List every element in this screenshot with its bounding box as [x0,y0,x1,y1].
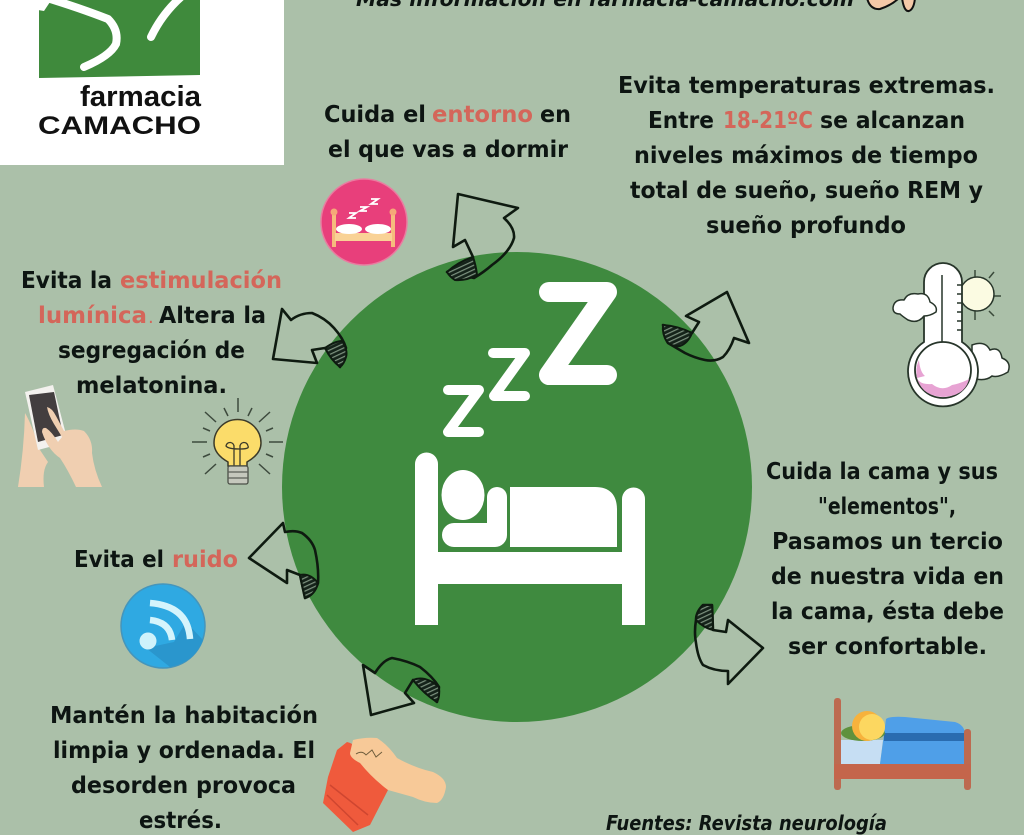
text: temperaturas: 18-21ºC [723,106,813,134]
pillow [841,725,885,741]
bed [415,453,645,625]
logo text: farmacia [80,81,202,113]
tube line and ticks [942,275,962,342]
arrow: to entorno [447,194,518,280]
blanket [880,717,965,764]
text: cama [766,457,1004,660]
arrow: to estimulación [273,309,346,367]
logo mark [38,0,200,78]
text: temperaturas: sueño profundo [706,211,906,239]
text: temperaturas: Evita temperaturas extremas. [618,71,995,99]
phone [25,385,68,450]
text: temperaturas: Entre [648,106,714,134]
big Z [549,292,607,375]
cloud left [893,294,936,321]
icon: hand holding phone [18,385,102,487]
icon: pink bed circle [321,179,407,265]
icon: person in bed [834,698,971,790]
text: estimulación lumínica: segregación de [58,336,245,364]
hand [350,738,446,803]
arrow: to ruido [249,523,318,598]
text: cama: Cuida la cama y sus [766,457,998,485]
arrow: to habitación [363,658,439,715]
arrow: to cama [695,605,763,684]
sheet [841,740,883,764]
arrow: to temperaturas [663,292,749,361]
text: ruido: Evita el [74,545,164,573]
icon: thermometer with sun and clouds [893,263,1009,406]
bed frame [834,698,841,790]
text: entorno: entorno [432,100,533,128]
text: habitación [50,701,318,834]
icon: light bulb [192,398,283,484]
head [442,470,484,520]
icon: pointing hand [867,0,915,11]
text: entorno: el que vas a dormir [328,135,568,163]
text: habitación: Mantén la habitación [50,701,318,729]
text: habitación: desorden provoca [71,771,296,799]
sun [960,270,1001,320]
screen [29,392,63,442]
text: estimulación lumínica: Altera la [159,301,266,329]
icon: hand holding red towel [323,738,446,832]
text: estimulación lumínica: Evita la [21,266,112,294]
text: habitación: limpia y ordenada. El [53,736,315,764]
text: ruido: ruido [172,545,238,573]
text: entorno: Cuida el [324,100,426,128]
text: estimulación lumínica: lumínica [38,301,147,329]
text: sources: Fuentes: Revista neurología [606,811,887,835]
text: estimulación lumínica: melatonina. [76,371,227,399]
icon: sleeping person in bed [415,292,645,625]
body [510,487,617,547]
bulb fluid [916,360,969,397]
left hand [18,413,48,487]
text: cama: "elementos", [818,492,956,520]
arm [442,487,507,547]
text: temperaturas: total de sueño, sueño REM y [630,176,983,204]
icon: blue wifi circle [121,584,205,668]
text: ruido [74,545,238,573]
thermometer body [908,263,978,406]
towel [323,742,388,832]
small Z [448,390,479,432]
text: estimulación lumínica: estimulación [120,266,282,294]
text: temperaturas: niveles máximos de tiempo [634,141,978,169]
logo: farmacia Camacho [0,0,284,165]
right hand [42,407,102,487]
text: cama: de nuestra vida en [771,562,1004,590]
text: cama: la cama, ésta debe [771,597,1004,625]
text: temperaturas [618,71,995,239]
text: habitación: estrés. [139,806,222,834]
cloud right [972,343,1009,380]
text: temperaturas: se alcanzan [820,106,965,134]
head [852,711,882,741]
central green circle [282,252,752,722]
text: entorno [324,100,571,163]
text: estimulación lumínica: . [148,307,154,328]
text: estimulación lumínica [21,266,282,399]
logo text [38,81,202,140]
medium Z [493,353,525,396]
bulb [915,342,971,398]
text: entorno: en [540,100,571,128]
text: cama: ser confortable. [788,632,987,660]
logo text: CAMACHO [38,112,201,140]
text: cama: Pasamos un tercio [772,527,1003,555]
